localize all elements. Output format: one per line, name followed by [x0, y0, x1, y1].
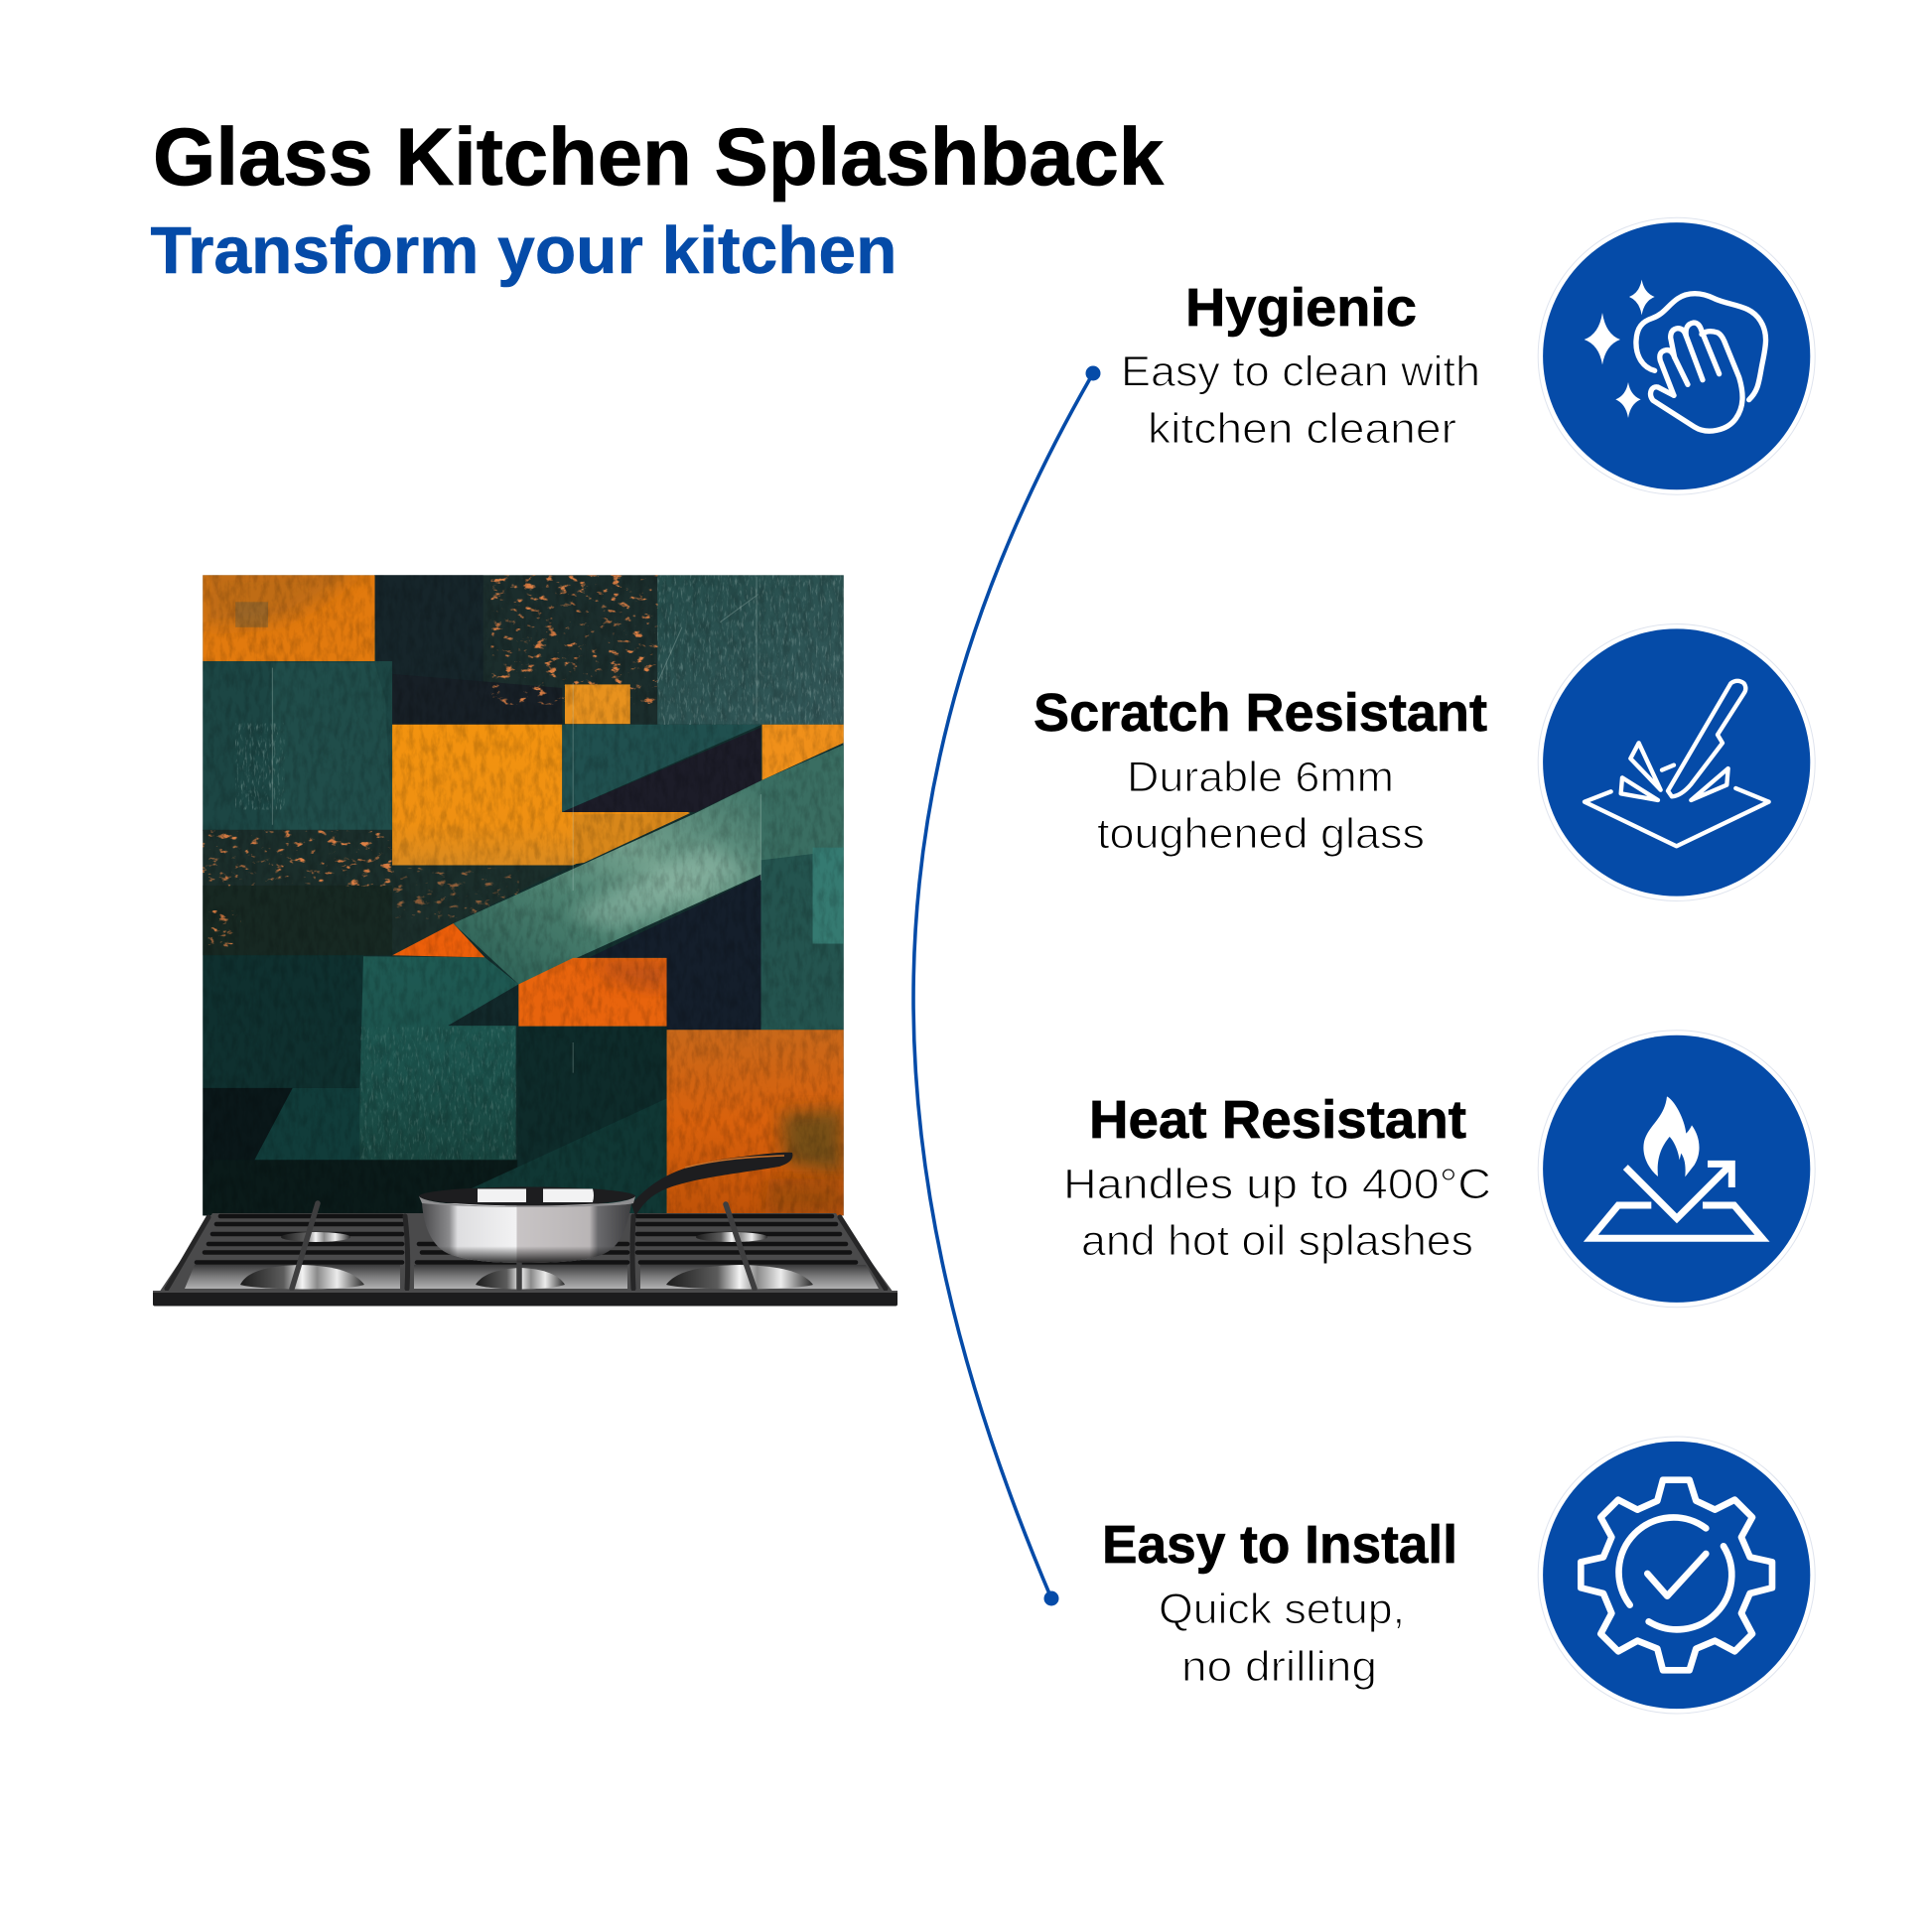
icon: gear with check	[1538, 1437, 1815, 1714]
feature: heat resistant: Heat Resistant	[1089, 1090, 1466, 1150]
hob back plate	[159, 1213, 894, 1293]
feature: easy to install	[1102, 1515, 1457, 1691]
lower left dark block	[203, 955, 204, 1088]
dark top middle block	[374, 575, 657, 576]
right orange wedge	[762, 725, 844, 780]
small orange block	[565, 684, 630, 724]
very dark bottom left	[203, 1088, 292, 1215]
feature: hygienic: Hygienic	[1185, 278, 1417, 338]
right burner	[666, 1232, 813, 1289]
hob front edge	[153, 1291, 897, 1307]
top dot	[1086, 365, 1100, 381]
icon: knife on glass	[1538, 623, 1815, 901]
dark bottom strip	[203, 1160, 518, 1215]
icon: flame over glass	[1538, 1031, 1815, 1308]
dark center lower block	[518, 1028, 667, 1168]
rust flecks on dark areas	[203, 831, 393, 887]
grate bars	[197, 1216, 856, 1263]
connector curve with end dots	[913, 365, 1100, 1606]
painted texture	[203, 575, 844, 1215]
dark left band	[203, 830, 392, 955]
feature: scratch resistant	[1034, 683, 1487, 858]
orange triangle	[392, 923, 484, 957]
vertical grate supports	[292, 1203, 755, 1289]
bottom dot	[1044, 1590, 1058, 1606]
feature: heat resistant: and hot oil splashes	[1081, 1217, 1473, 1265]
dark triangle under band	[448, 984, 518, 1026]
right teal column	[760, 745, 844, 1030]
feature: heat resistant	[1063, 1090, 1491, 1265]
feature: hygienic: kitchen cleaner	[1148, 405, 1456, 453]
title: Glass Kitchen Splashback	[153, 112, 1164, 203]
top right teal block	[657, 575, 844, 725]
orange top left block	[203, 575, 375, 661]
feature: hygienic	[1121, 278, 1480, 453]
feature: scratch resistant: Durable 6mm	[1127, 754, 1394, 801]
main orange block	[392, 725, 690, 866]
dark navy block	[590, 876, 760, 1030]
feature: heat resistant: Handles up to 400°C	[1063, 1161, 1491, 1208]
feature: easy to install: Quick setup,	[1159, 1586, 1405, 1633]
pan handle	[631, 1153, 792, 1216]
feature: easy to install: no drilling	[1181, 1643, 1377, 1691]
gas hob with pan	[153, 1153, 897, 1307]
middle burner	[476, 1268, 565, 1289]
left teal block	[203, 661, 392, 831]
scratches	[272, 577, 760, 1073]
lower teal block	[358, 956, 518, 1160]
feature: scratch resistant: toughened glass	[1097, 810, 1425, 858]
steel burner trays	[185, 1265, 879, 1289]
left burner	[240, 1232, 364, 1289]
feature: easy to install: Easy to Install	[1102, 1515, 1457, 1575]
pan body	[422, 1203, 631, 1263]
subtitle: Transform your kitchen	[151, 213, 897, 288]
icon: hand wiping with sparkles	[1538, 217, 1815, 494]
feature: hygienic: Easy to clean with	[1121, 347, 1480, 395]
pan rim	[419, 1187, 635, 1205]
dark wedge	[562, 728, 760, 812]
feature: scratch resistant: Scratch Resistant	[1034, 683, 1487, 743]
teal wedge	[562, 725, 762, 812]
glass splashback artwork panel	[203, 567, 844, 1215]
